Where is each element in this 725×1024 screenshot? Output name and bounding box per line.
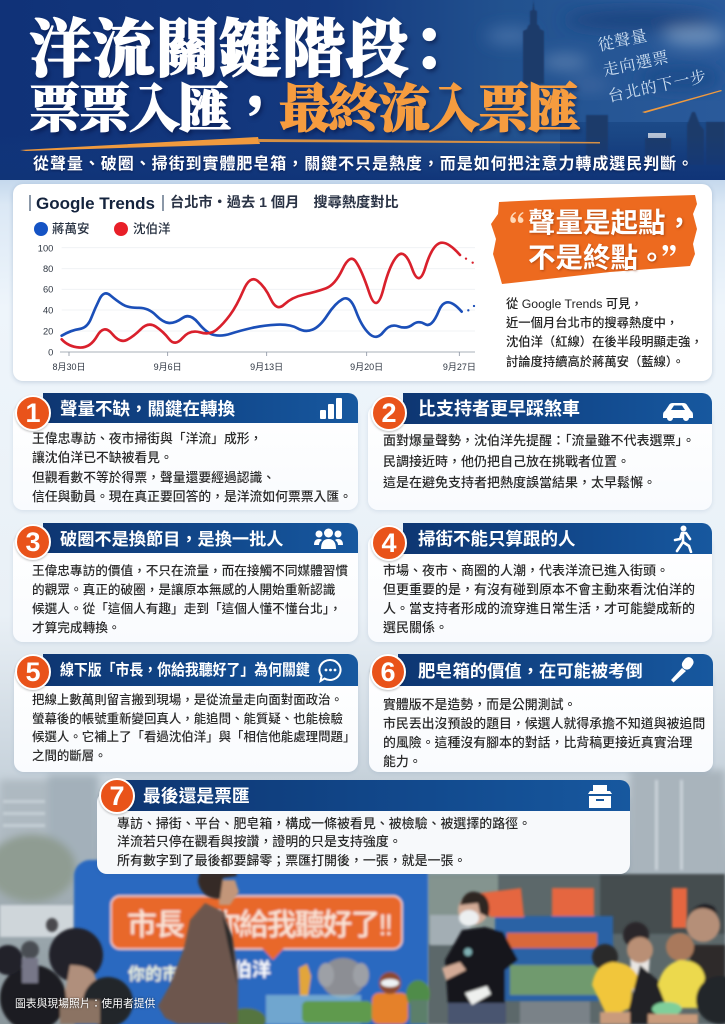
quote explanation text: 近一個月台北市的搜尋熱度中， <box>506 316 678 330</box>
panel 1: 信任與動員。現在真正要回答的，是洋流如何票票入匯。 <box>32 489 352 504</box>
icon: microphone <box>671 657 694 682</box>
panel 1: 但觀看數不等於得票，聲量還要經過認識、 <box>32 470 275 485</box>
panel 6: 實體版不是造勢，而是公開測試。 <box>383 697 576 712</box>
skyline with Taipei 101 <box>346 2 725 180</box>
panel 3: 3 <box>25 527 41 557</box>
line chart: search interest <box>38 241 476 372</box>
line chart: search interest: 8月30日 <box>52 362 86 372</box>
rally board: 市長，你給我聽好了!! <box>127 909 393 942</box>
rally board: 伯洋 <box>233 959 271 981</box>
line chart: search interest: 9月20日 <box>350 362 383 372</box>
panel 5: 5 <box>25 657 41 687</box>
panel 6: 市民丟出沒預設的題目，候選人就得承擔不知道與被追問 <box>383 716 705 731</box>
quote explanation text: 從 Google Trends 可見， <box>506 297 643 311</box>
icon: ballot box <box>588 785 612 808</box>
panel 4 <box>367 523 713 644</box>
callout: orange brush quote: ” <box>660 237 692 283</box>
panel 2: 2 <box>381 398 397 428</box>
icon: speech bubble <box>318 659 342 683</box>
chart heading: 台北市・過去 1 個月 搜尋熱度對比 <box>170 195 399 211</box>
speaker man in brown coat <box>158 864 239 1024</box>
panel 7: 專訪、掃街、平台、肥皂箱，構成一條被看見、被檢驗、被選擇的路徑。 <box>117 816 531 831</box>
panel 3: 王偉忠專訪的價值，不只在流量，而在接觸不同媒體習慣 <box>32 564 348 578</box>
panel 5: 線下版「市長，你給我聽好了」為何關鍵 <box>60 662 310 679</box>
panel 1: 讓沈伯洋已不缺被看見。 <box>32 450 173 465</box>
chart heading: Google Trends <box>36 194 155 213</box>
audience on left <box>0 918 133 1024</box>
callout: orange brush quote: 聲量是起點， <box>528 207 693 238</box>
panel 2: 這是在避免支持者把熱度誤當結果，太早鬆懈。 <box>383 475 656 490</box>
panel 4: 選民關係。 <box>383 620 448 635</box>
chart heading <box>29 194 399 213</box>
rally board <box>74 860 430 1024</box>
panel 7: 洋流若只停在觀看與按讚，證明的只是支持強度。 <box>117 834 402 849</box>
chart legend: 沈伯洋 <box>133 222 171 236</box>
line chart: search interest: 40 <box>43 305 53 315</box>
panel 7: 7 <box>109 781 125 811</box>
panel 7: 最後還是票匯 <box>143 786 250 806</box>
title line 1: 洋流關鍵階段： <box>29 0 461 90</box>
chart legend: 蔣萬安 <box>52 222 90 236</box>
line chart: search interest: 0 <box>48 347 53 357</box>
panel: Google Trends chart and quote <box>13 184 712 381</box>
panel 3: 破圈不是換節目，是換一批人 <box>60 529 283 549</box>
panel 3: 才算完成轉換。 <box>32 621 120 635</box>
panel 1: 聲量不缺，關鍵在轉換 <box>60 399 235 419</box>
panel 2: 民調接近時，他仍把自己放在挑戰者位置。 <box>383 454 630 469</box>
panel 1: 1 <box>25 398 41 428</box>
callout: orange brush quote: 不是終點。 <box>528 242 666 273</box>
photo credit: 圖表與現場照片：使用者提供 <box>15 998 155 1010</box>
panel 3 <box>12 523 359 644</box>
panel 2: 面對爆量聲勢，沈伯洋先提醒：「流量雖不代表選票」。 <box>383 433 695 448</box>
quote explanation text <box>506 297 703 369</box>
panel 4: 市場、夜市、商圈的人潮，代表洋流已進入街頭。 <box>383 563 669 578</box>
icon: walking person <box>674 526 692 553</box>
handwritten slogan: 從聲量 <box>596 23 650 56</box>
icon: bar chart <box>320 398 342 419</box>
line chart: search interest: 60 <box>43 285 53 295</box>
families with children <box>592 904 725 1024</box>
line chart: search interest: 20 <box>43 326 53 336</box>
header banner <box>0 0 725 180</box>
line chart: search interest: 9月13日 <box>250 362 283 372</box>
panel 5 <box>13 654 359 774</box>
callout: orange brush quote: “ <box>494 204 526 250</box>
panel 4: 人。當支持者形成的流穿進日常生活，才可能變成新的 <box>383 601 695 616</box>
panel 6: 能力。 <box>383 754 422 769</box>
panel 4: 掃街不能只算跟的人 <box>418 529 576 549</box>
quote explanation text: 沈伯洋（紅線）在後半段明顯走強， <box>506 335 703 349</box>
panel 4: 4 <box>381 528 397 558</box>
panel 2: 比支持者更早踩煞車 <box>418 399 580 419</box>
panel 5: 把線上數萬則留言搬到現場，是從流量走向面對面政治。 <box>32 693 343 707</box>
panel 1 <box>12 393 359 512</box>
panel 6: 6 <box>380 657 396 687</box>
line chart: search interest: 80 <box>43 264 53 274</box>
panel 3: 的觀眾。真正的破圈，是讓原本無感的人開始重新認識 <box>32 583 335 597</box>
rally board: 你的市長 <box>128 964 196 984</box>
icon: group of people <box>314 528 343 549</box>
icon: car <box>663 403 693 421</box>
panel 6: 的風險。這種沒有腳本的對話，比背稿更接近真實治理 <box>383 735 692 750</box>
panel 1: 王偉忠專訪、夜市掃街與「洋流」成形， <box>32 431 262 446</box>
orange brush underline <box>20 137 600 151</box>
quote explanation text: 討論度持續高於蔣萬安（藍線）。 <box>506 355 684 369</box>
orange slogan stroke <box>642 90 722 113</box>
handwritten slogan: 走向選票 <box>601 44 671 81</box>
panel 5: 之間的斷層。 <box>32 749 107 763</box>
panel 6 <box>368 654 714 774</box>
panel 3: 候選人。從「這個人有趣」走到「這個人懂不懂台北」， <box>32 602 342 616</box>
line chart: search interest: 9月27日 <box>443 362 476 372</box>
panel 6: 肥皂箱的價值，在可能被考倒 <box>418 661 643 681</box>
callout: orange brush quote <box>491 195 697 284</box>
panel 7 <box>97 778 630 874</box>
subheading: 從聲量、破圈、掃街到實體肥皂箱，關鍵不只是熱度，而是如何把注意力轉成選民判斷。 <box>33 156 694 173</box>
handwritten slogan <box>596 23 709 107</box>
line chart: search interest: 9月6日 <box>154 362 182 372</box>
speaker woman with microphone <box>442 888 687 1024</box>
title line 2: 票票入匯，最終流入票匯 <box>29 67 578 142</box>
panel 2 <box>367 393 713 512</box>
line chart: search interest: 100 <box>38 243 53 253</box>
handwritten slogan: 台北的下一步 <box>606 63 709 107</box>
panel 5: 候選人。它補上了「看過沈伯洋」與「相信他能處理問題」 <box>32 730 355 744</box>
chart legend <box>34 222 171 236</box>
panel 5: 螢幕後的帳號重新變回真人，能追問、能質疑、也能檢驗 <box>32 712 343 726</box>
panel 4: 但更重要的是，有沒有碰到原本不會主動來看沈伯洋的 <box>383 582 695 597</box>
panel 7: 所有數字到了最後都要歸零；票匯打開後，一張，就是一張。 <box>117 853 466 868</box>
